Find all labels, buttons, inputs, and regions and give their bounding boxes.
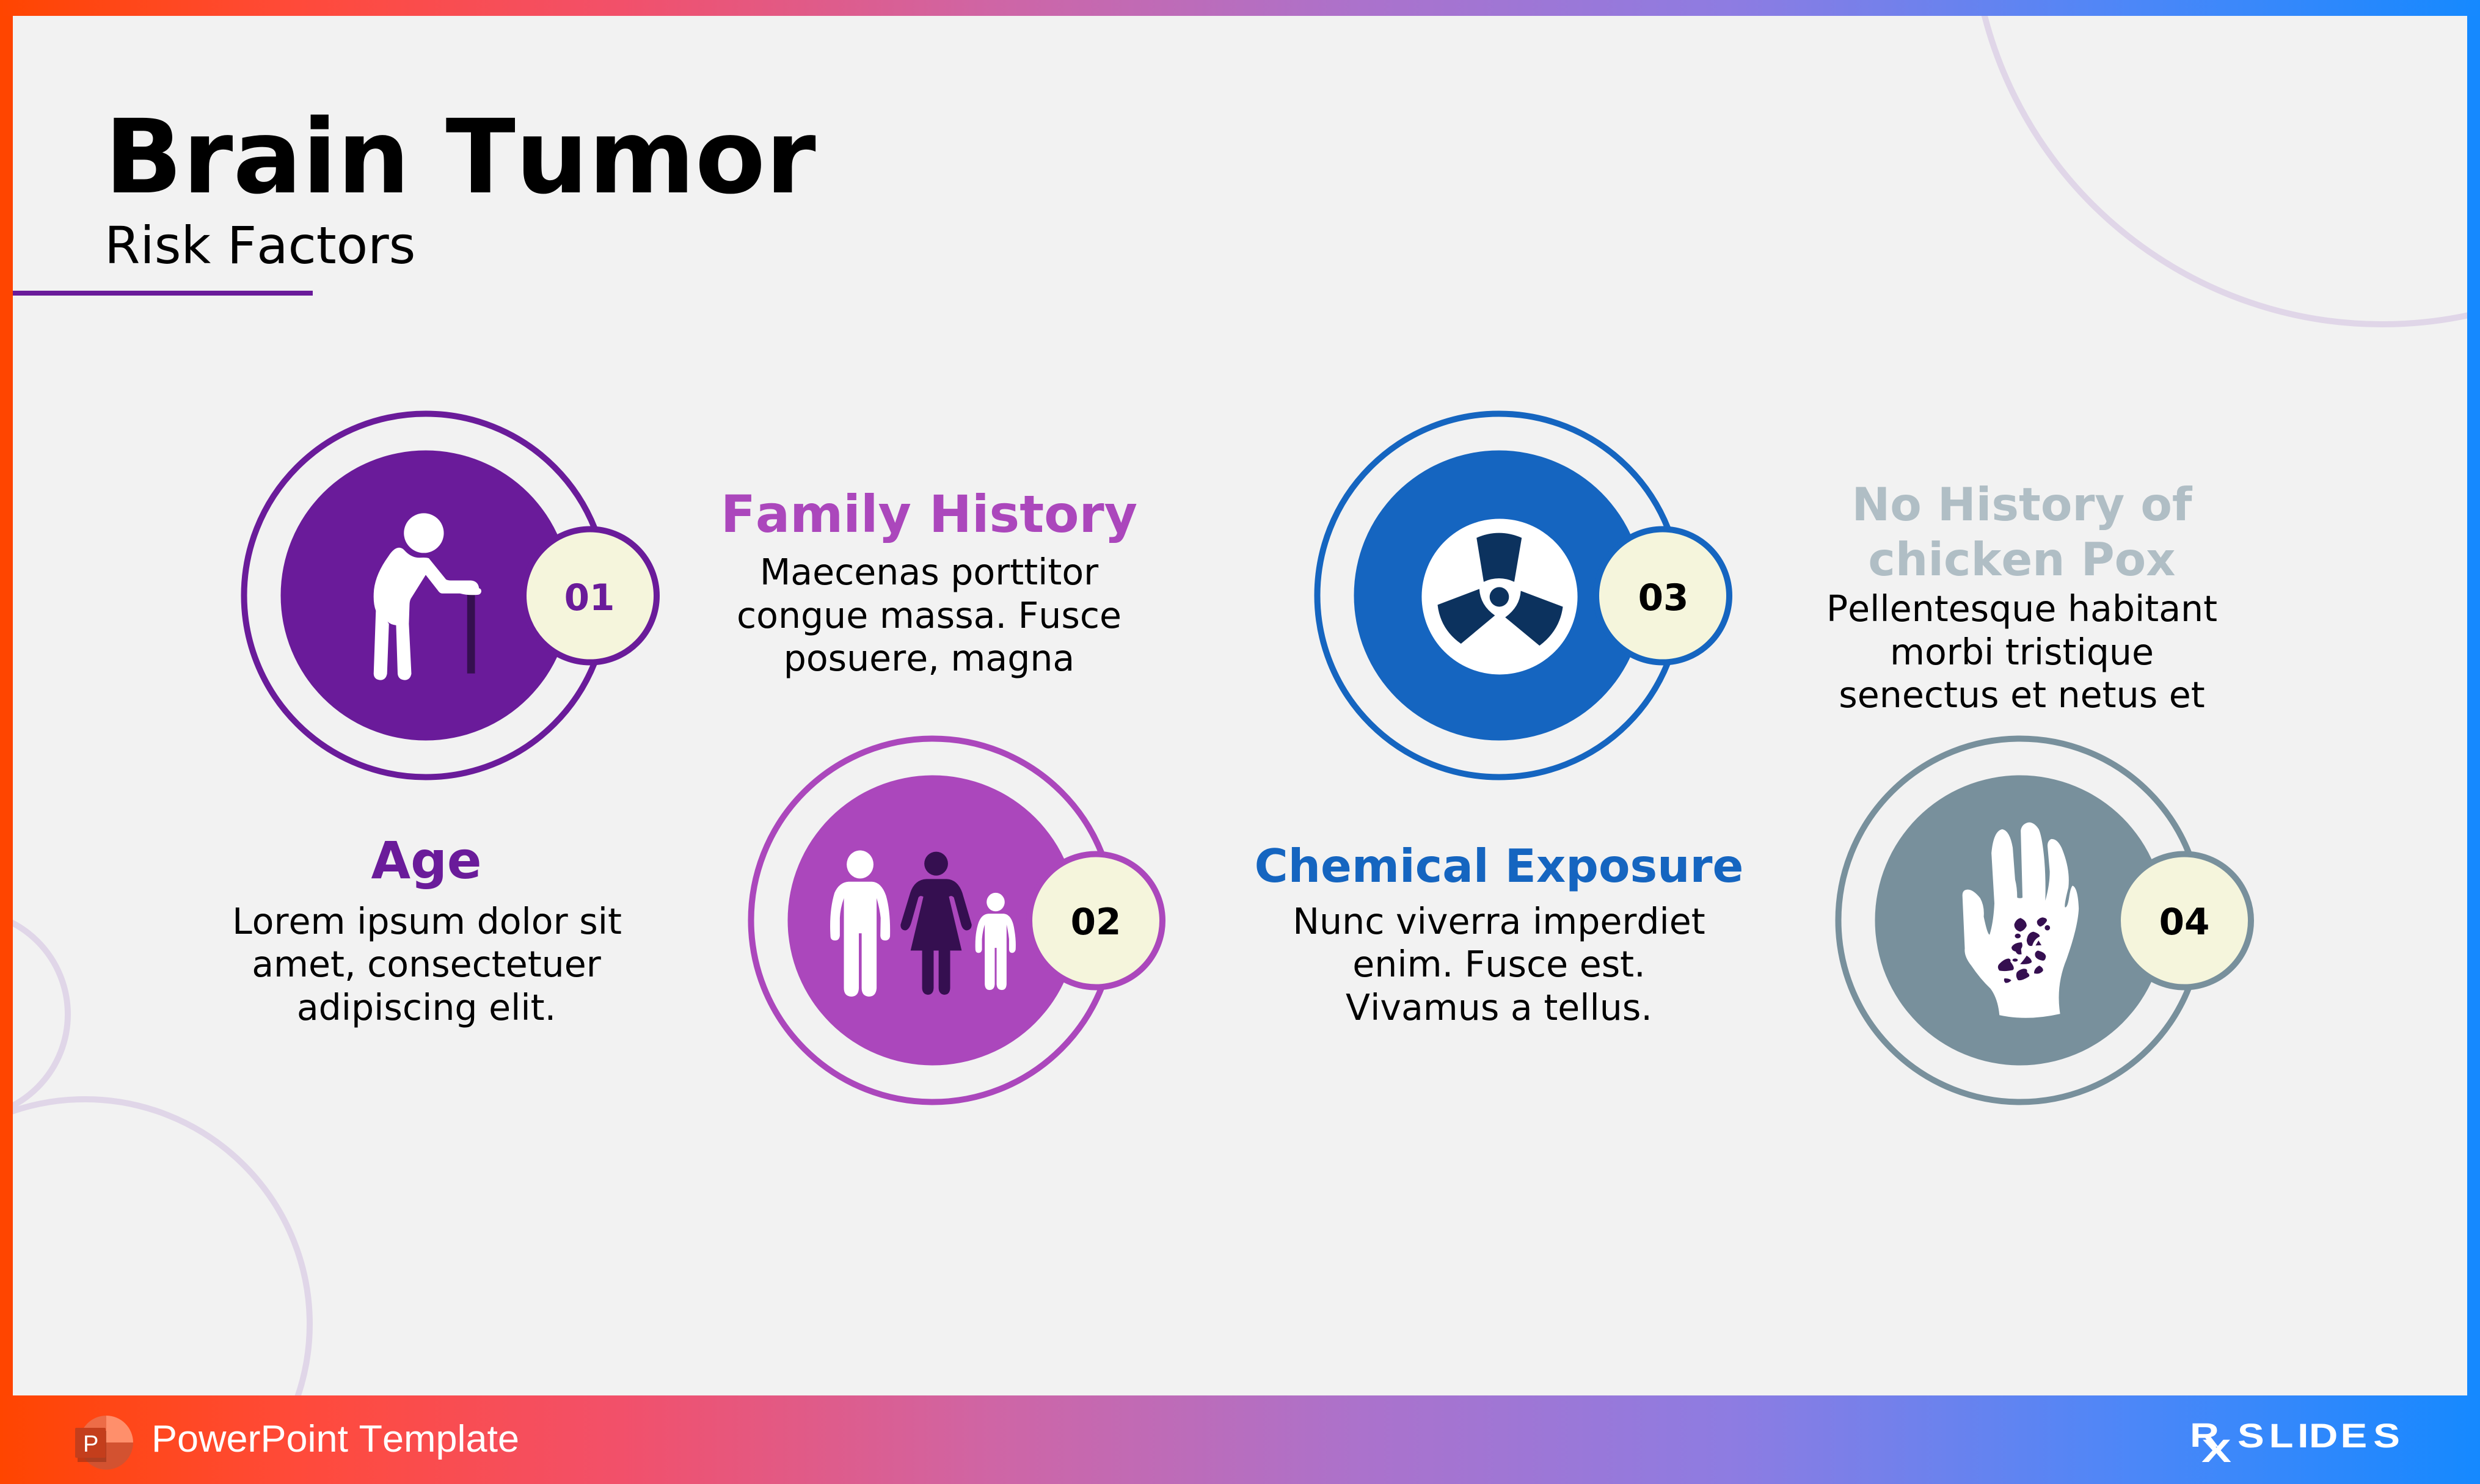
number 02: 02 (1071, 901, 1121, 944)
subtitle: Risk Factors (104, 216, 415, 275)
text block: Age (232, 831, 622, 1028)
description: Vivamus a tellus. (1346, 987, 1652, 1028)
icon: family (830, 851, 1016, 997)
outer ring (244, 414, 607, 777)
footer: RX Slides logo: R (2190, 1416, 2219, 1454)
footer: RX Slides logo: SLIDES (2237, 1416, 2400, 1455)
heading: Family History (721, 484, 1137, 544)
description: enim. Fusce est. (1352, 944, 1646, 985)
text block: Family History (721, 484, 1137, 679)
description: Nunc viverra imperdiet (1293, 901, 1705, 942)
panel: 04 chicken pox graphic (1839, 739, 2251, 1102)
description: amet, consectetuer (252, 944, 602, 985)
footer: RX Slides logo: X (2201, 1433, 2231, 1469)
number badge 04 (2118, 854, 2251, 987)
decorative circle: left small (0, 911, 68, 1118)
description: adipiscing elit. (297, 987, 556, 1028)
panel: 01 age graphic (244, 414, 657, 777)
footer: PowerPoint icon: P (83, 1431, 98, 1457)
icon: elderly person with cane (374, 513, 481, 680)
frame: right edge bar (2467, 0, 2480, 1484)
text block: No History of chicken Pox: chicken Pox (1868, 533, 2176, 586)
text block: Chemical Exposure (1255, 839, 1743, 1028)
panel: 03 chemical exposure graphic (1317, 414, 1729, 777)
panel: 02 family history graphic (751, 739, 1162, 1102)
description: Maecenas porttitor (760, 551, 1099, 593)
number 01: 01 (564, 577, 615, 619)
number 04: 04 (2159, 901, 2209, 944)
footer: RX Slides logo (2190, 1416, 2400, 1469)
footer: PowerPoint icon (75, 1416, 133, 1469)
heading: Age (371, 831, 482, 890)
decorative circle: top right (1972, 0, 2480, 324)
number 03: 03 (1638, 577, 1688, 619)
footer: template label: PowerPoint Template (151, 1418, 519, 1460)
text block: No History of chicken Pox (1826, 478, 2217, 716)
title: Brain Tumor (104, 97, 816, 217)
outer ring (1839, 739, 2201, 1102)
decorative circle: bottom left large (0, 1099, 310, 1484)
icon: hand with spots (1963, 823, 2079, 1018)
heading: Chemical Exposure (1255, 839, 1743, 893)
description: morbi tristique (1890, 631, 2154, 673)
number badge 03 (1596, 529, 1729, 662)
description: congue massa. Fusce (737, 595, 1121, 636)
title underline (13, 291, 313, 296)
outer ring (751, 739, 1114, 1102)
icon: radiation symbol (1421, 518, 1578, 674)
frame: top gradient bar (0, 0, 2480, 16)
filled disc (281, 451, 571, 740)
description: senectus et netus et (1839, 674, 2205, 716)
number badge 02 (1029, 854, 1162, 987)
filled disc (1875, 776, 2165, 1065)
description: Lorem ipsum dolor sit (232, 901, 622, 942)
description: Pellentesque habitant (1826, 588, 2217, 630)
frame: bottom gradient bar (0, 1395, 2480, 1484)
filled disc (788, 776, 1078, 1065)
heading: No History of (1851, 478, 2193, 531)
description: posuere, magna (784, 638, 1074, 679)
outer ring (1317, 414, 1681, 777)
frame: left edge bar (0, 0, 13, 1484)
number badge 01 (523, 529, 657, 662)
filled disc (1354, 451, 1644, 740)
